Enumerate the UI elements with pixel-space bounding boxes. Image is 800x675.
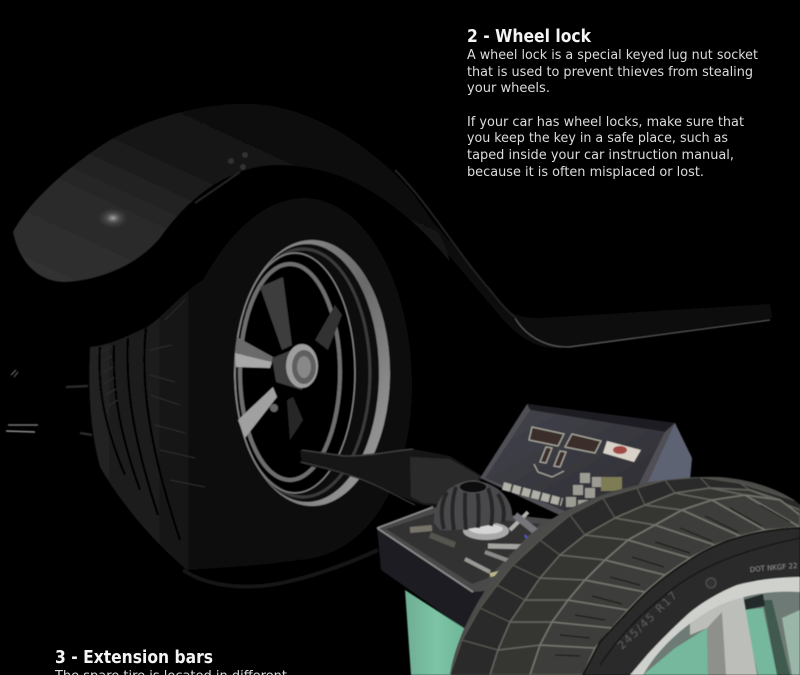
tools in tray xyxy=(410,512,540,575)
button row xyxy=(503,486,562,502)
wheel balancer machine xyxy=(300,404,692,675)
console screen xyxy=(485,410,665,512)
green cabinet xyxy=(405,590,470,675)
rim xyxy=(234,240,390,506)
pale barrel xyxy=(782,610,800,675)
block sipes xyxy=(555,505,790,656)
heading: extension bars: 3 - Extension bars xyxy=(55,648,213,668)
dark wheel barrel xyxy=(763,600,790,675)
tyre xyxy=(89,198,412,570)
sidewall xyxy=(583,528,800,675)
keypad xyxy=(566,473,602,510)
spoke shaded face xyxy=(707,612,726,675)
sidewall markings: DOT NKGF 22 xyxy=(749,562,798,574)
fender bolts xyxy=(228,152,248,170)
sidewall markings xyxy=(600,538,800,665)
section: 2 - Wheel lock xyxy=(467,27,758,180)
displays xyxy=(529,427,601,467)
console housing xyxy=(480,404,692,520)
red logo label xyxy=(603,441,641,462)
green right of spoke xyxy=(743,608,777,675)
body text: wheel lock: A wheel lock is a special keyed lug nut socket xyxy=(467,48,758,63)
rim band xyxy=(630,577,800,675)
spokes xyxy=(235,277,342,440)
heading: wheel lock: 2 - Wheel lock xyxy=(467,27,591,47)
tyre shoulder edge xyxy=(583,528,800,675)
fender trim line xyxy=(195,172,240,203)
clamp arm xyxy=(300,449,482,510)
body text: wheel lock: that is used to prevent thieves from stealing xyxy=(467,65,753,80)
diagram line xyxy=(534,464,564,477)
car photo: dark fender and wheel xyxy=(6,104,772,587)
body text: wheel lock: your wheels. xyxy=(467,81,550,96)
body text: wheel lock: because it is often misplaced or lost. xyxy=(467,165,704,180)
floor curve xyxy=(183,550,378,587)
middle tread blocks xyxy=(490,488,800,675)
body text: wheel lock: taped inside your car instruction manual, xyxy=(467,148,734,163)
body text: wheel lock: you keep the key in a safe place, such as xyxy=(467,131,728,146)
tread sipes xyxy=(102,300,205,487)
green seen through wheel xyxy=(643,628,708,675)
hub cap xyxy=(272,344,318,390)
car body sill xyxy=(360,160,772,348)
fender xyxy=(13,104,450,282)
body text: wheel lock: If your car has wheel locks, make sure that xyxy=(467,115,744,130)
tread grooves xyxy=(99,328,180,540)
suspension glints xyxy=(6,370,92,435)
body text: wheel lock xyxy=(467,48,758,180)
yellow button xyxy=(601,477,622,491)
wheel spoke xyxy=(690,595,757,675)
winter tyre on wheel xyxy=(440,470,800,675)
section: 3 - Extension bars xyxy=(54,648,287,675)
sidewall markings: 245/45 R17 xyxy=(615,588,681,652)
fender highlight xyxy=(97,207,129,229)
shoulder tread blocks xyxy=(530,495,800,675)
wheel opening xyxy=(640,586,800,675)
edge tread blocks xyxy=(450,477,800,675)
lug nut xyxy=(270,404,278,412)
parts tray xyxy=(377,507,560,630)
barrel shadow xyxy=(743,594,765,610)
tread xyxy=(440,470,800,675)
adapter dome xyxy=(434,481,512,530)
